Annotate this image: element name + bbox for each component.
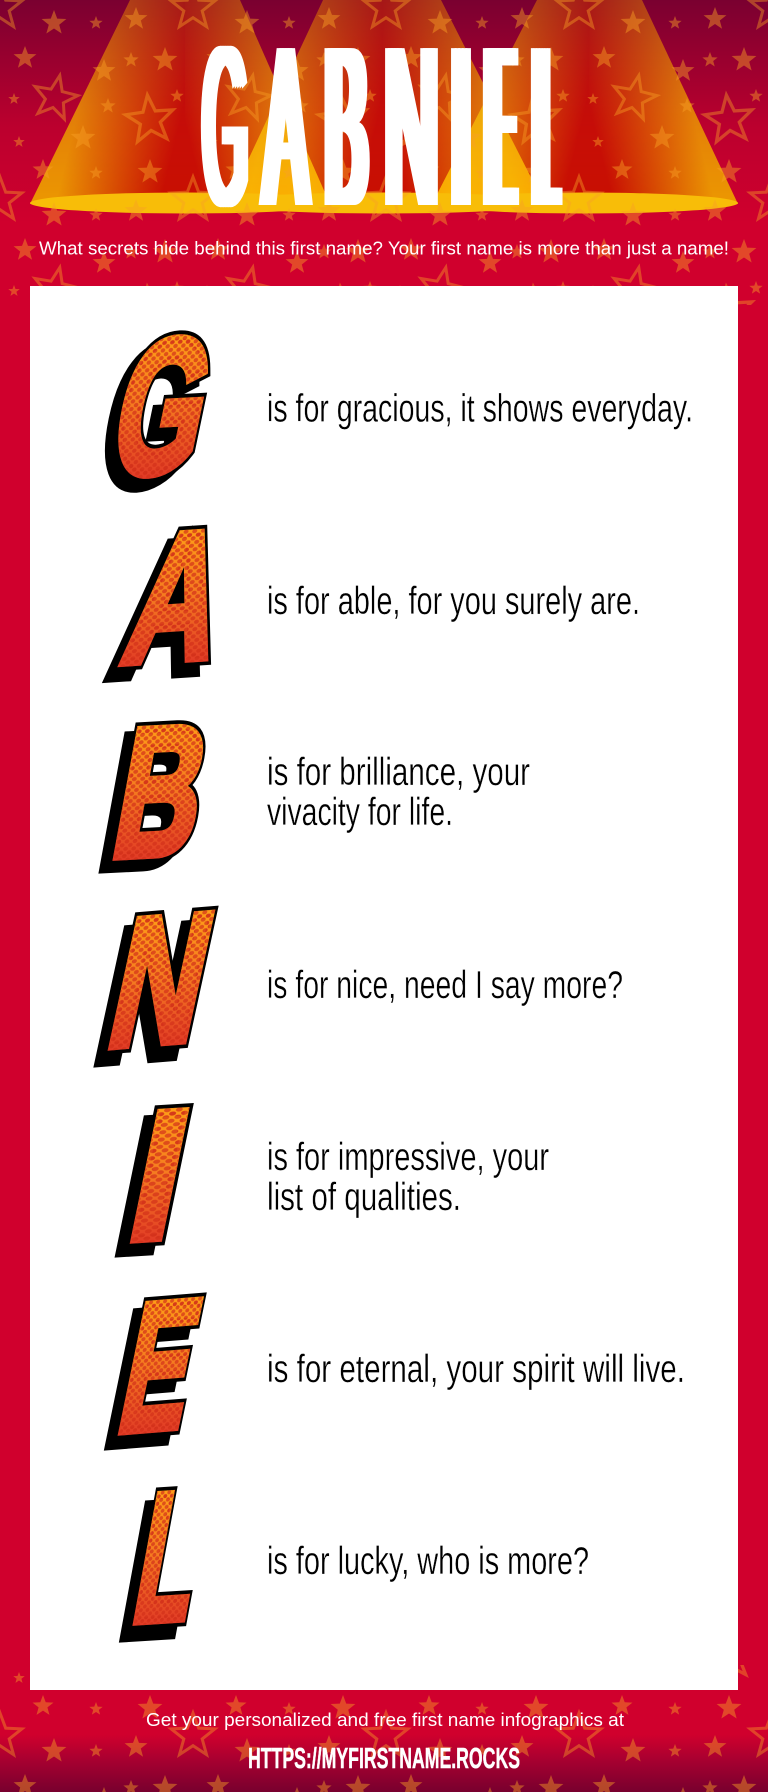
- title: A: [264, 0, 307, 254]
- row: letter I: [104, 1071, 549, 1289]
- text: I lines: [267, 1136, 549, 1219]
- comic letter L: L: [122, 1453, 217, 1662]
- comic letter B: B: [90, 696, 211, 906]
- comic letter G: G: [97, 296, 229, 516]
- text: B lines: [267, 751, 530, 834]
- title: I: [453, 0, 469, 254]
- top star pattern overlay: [0, 0, 768, 305]
- middle spotlight cone: [244, 0, 531, 195]
- comic letter L: L: [122, 1453, 217, 1662]
- comic letter A: A: [110, 491, 245, 702]
- row: letter E: [95, 1261, 685, 1482]
- comic letter E: E: [106, 1261, 215, 1471]
- title: G: [203, 0, 248, 254]
- text: L line: is for lucky, who is more?: [267, 1540, 589, 1583]
- comic letter I: I: [115, 1071, 205, 1279]
- comic letter B: B: [101, 687, 222, 897]
- text: I lines: list of qualities.: [267, 1176, 461, 1219]
- title: N: [385, 0, 438, 253]
- comic letter G: G: [86, 306, 218, 526]
- comic letter I: I: [104, 1081, 194, 1289]
- comic letter B: B: [101, 687, 222, 897]
- comic letter B: B: [101, 687, 222, 897]
- row: letter B: [90, 687, 530, 906]
- row: letter N: [83, 874, 623, 1099]
- text: B lines: is for brilliance, your: [267, 751, 530, 794]
- title: [203, 0, 555, 254]
- title: L: [536, 0, 555, 254]
- comic letter A: A: [110, 491, 245, 702]
- text: N line: is for nice, need I say more?: [267, 964, 623, 1007]
- footer prompt: Get your personalized and free first name infographics at: [146, 1710, 624, 1730]
- row: letter L: [111, 1453, 589, 1675]
- comic letter I: I: [115, 1071, 205, 1279]
- comic letter N: N: [83, 887, 218, 1099]
- comic letter G: G: [97, 296, 229, 516]
- title: E: [488, 0, 513, 254]
- subtitle: What secrets hide behind this first name? Your first name is more than just a name!: [39, 238, 729, 258]
- text: B lines: vivacity for life.: [267, 791, 453, 834]
- row: letter A: [99, 491, 640, 714]
- white content panel: [30, 286, 738, 1690]
- comic letter I: I: [115, 1071, 205, 1279]
- row: letter G: [86, 296, 693, 526]
- comic letter N: N: [94, 874, 229, 1086]
- left spotlight cone: [30, 0, 330, 204]
- right spotlight cone: [432, 0, 738, 204]
- title: B: [326, 0, 367, 254]
- spotlight beams: [30, 0, 738, 205]
- comic letter A: A: [99, 503, 234, 714]
- comic letter A: A: [110, 491, 245, 702]
- bottom star pattern overlay: [0, 1665, 768, 1792]
- comic letter E: E: [95, 1272, 204, 1482]
- comic letter N: N: [94, 874, 229, 1086]
- comic letter L: L: [122, 1453, 217, 1662]
- footer url: HTTPS://MYFIRSTNAME.ROCKS: [248, 1743, 520, 1775]
- comic letter G: G: [97, 296, 229, 516]
- comic letter L: L: [111, 1466, 206, 1675]
- comic letter N: N: [94, 874, 229, 1086]
- comic letter E: E: [106, 1261, 215, 1471]
- spotlight floor ellipses: [30, 192, 738, 214]
- text: A line: is for able, for you surely are.: [267, 580, 640, 623]
- comic letter E: E: [106, 1261, 215, 1471]
- text: I lines: is for impressive, your: [267, 1136, 549, 1179]
